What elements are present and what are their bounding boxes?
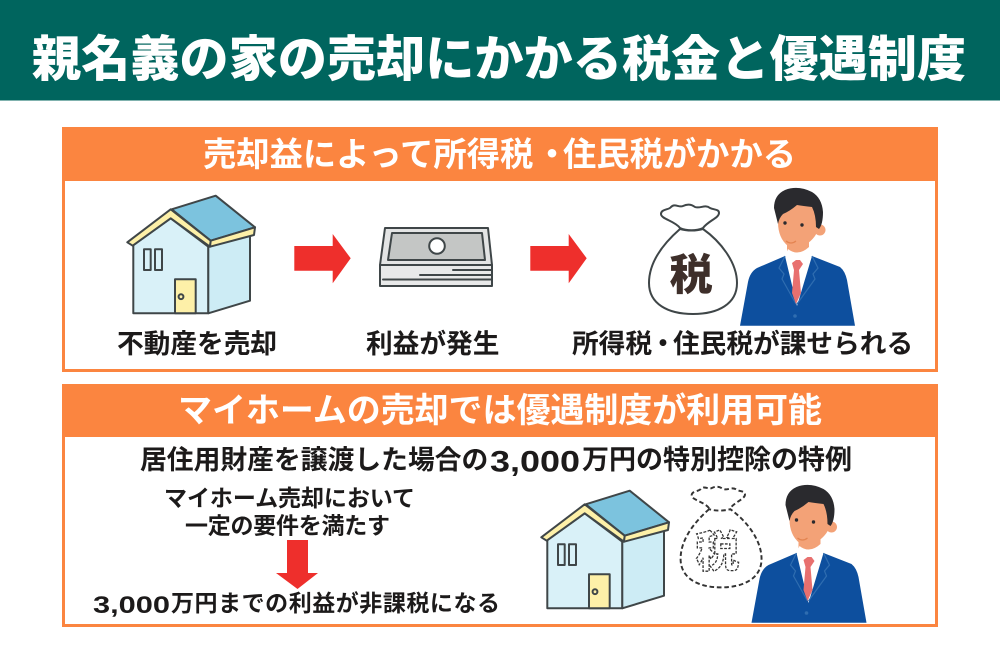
icon: businessman [752,485,866,623]
icon: house [127,196,255,313]
caption: sell real estate: 不動産を売却 [117,329,277,359]
arrow: profit to tax [530,234,587,283]
subheading: special deduction: 万円の特別控除の特例 [582,445,852,475]
panel: income and resident tax [62,127,938,370]
icon: house [541,491,669,608]
arrow: down [276,540,318,589]
icon: tax money bag [649,205,737,314]
icon: businessman [740,188,855,326]
caption: taxes imposed: 住民税が課せられる [673,329,913,359]
panel heading bar [62,127,938,181]
text: tax exempt: 3,000 [93,592,170,619]
caption: taxes imposed: 所得税 [572,329,652,359]
title banner [0,0,1000,100]
panel heading bar: ・ [535,137,569,174]
text: requirement [164,485,415,538]
caption: profit occurs: 利益が発生 [366,329,499,359]
title text: 親名義の家の売却にかかる税金と優遇制度 [32,33,966,87]
panel heading bar [62,384,938,437]
panel heading bar: マイホームの売却では優遇制度が利用可能 [178,391,822,430]
panel heading bar: 住民税がかかる [563,136,796,174]
subheading: special deduction: 居住用財産を譲渡した場合の [140,445,488,475]
arrow: house to profit [294,234,351,283]
icon: dashed tax bag: 税 [696,529,739,577]
icon: stack of money [380,228,492,286]
text: requirement: マイホーム売却において [164,485,415,511]
text: requirement: 一定の要件を満たす [185,512,390,538]
caption: taxes imposed: ・ [650,329,676,359]
panel heading bar: 売却益によって所得税 [203,137,533,174]
subheading: special deduction: 3,000 [490,446,580,478]
icon: tax money bag: 税 [670,252,712,300]
subheading: special deduction [140,445,852,478]
panel: my-home preferential system [62,384,938,626]
icon: dashed tax bag [681,487,762,587]
text: tax exempt: 万円までの利益が非課税になる [171,590,500,616]
